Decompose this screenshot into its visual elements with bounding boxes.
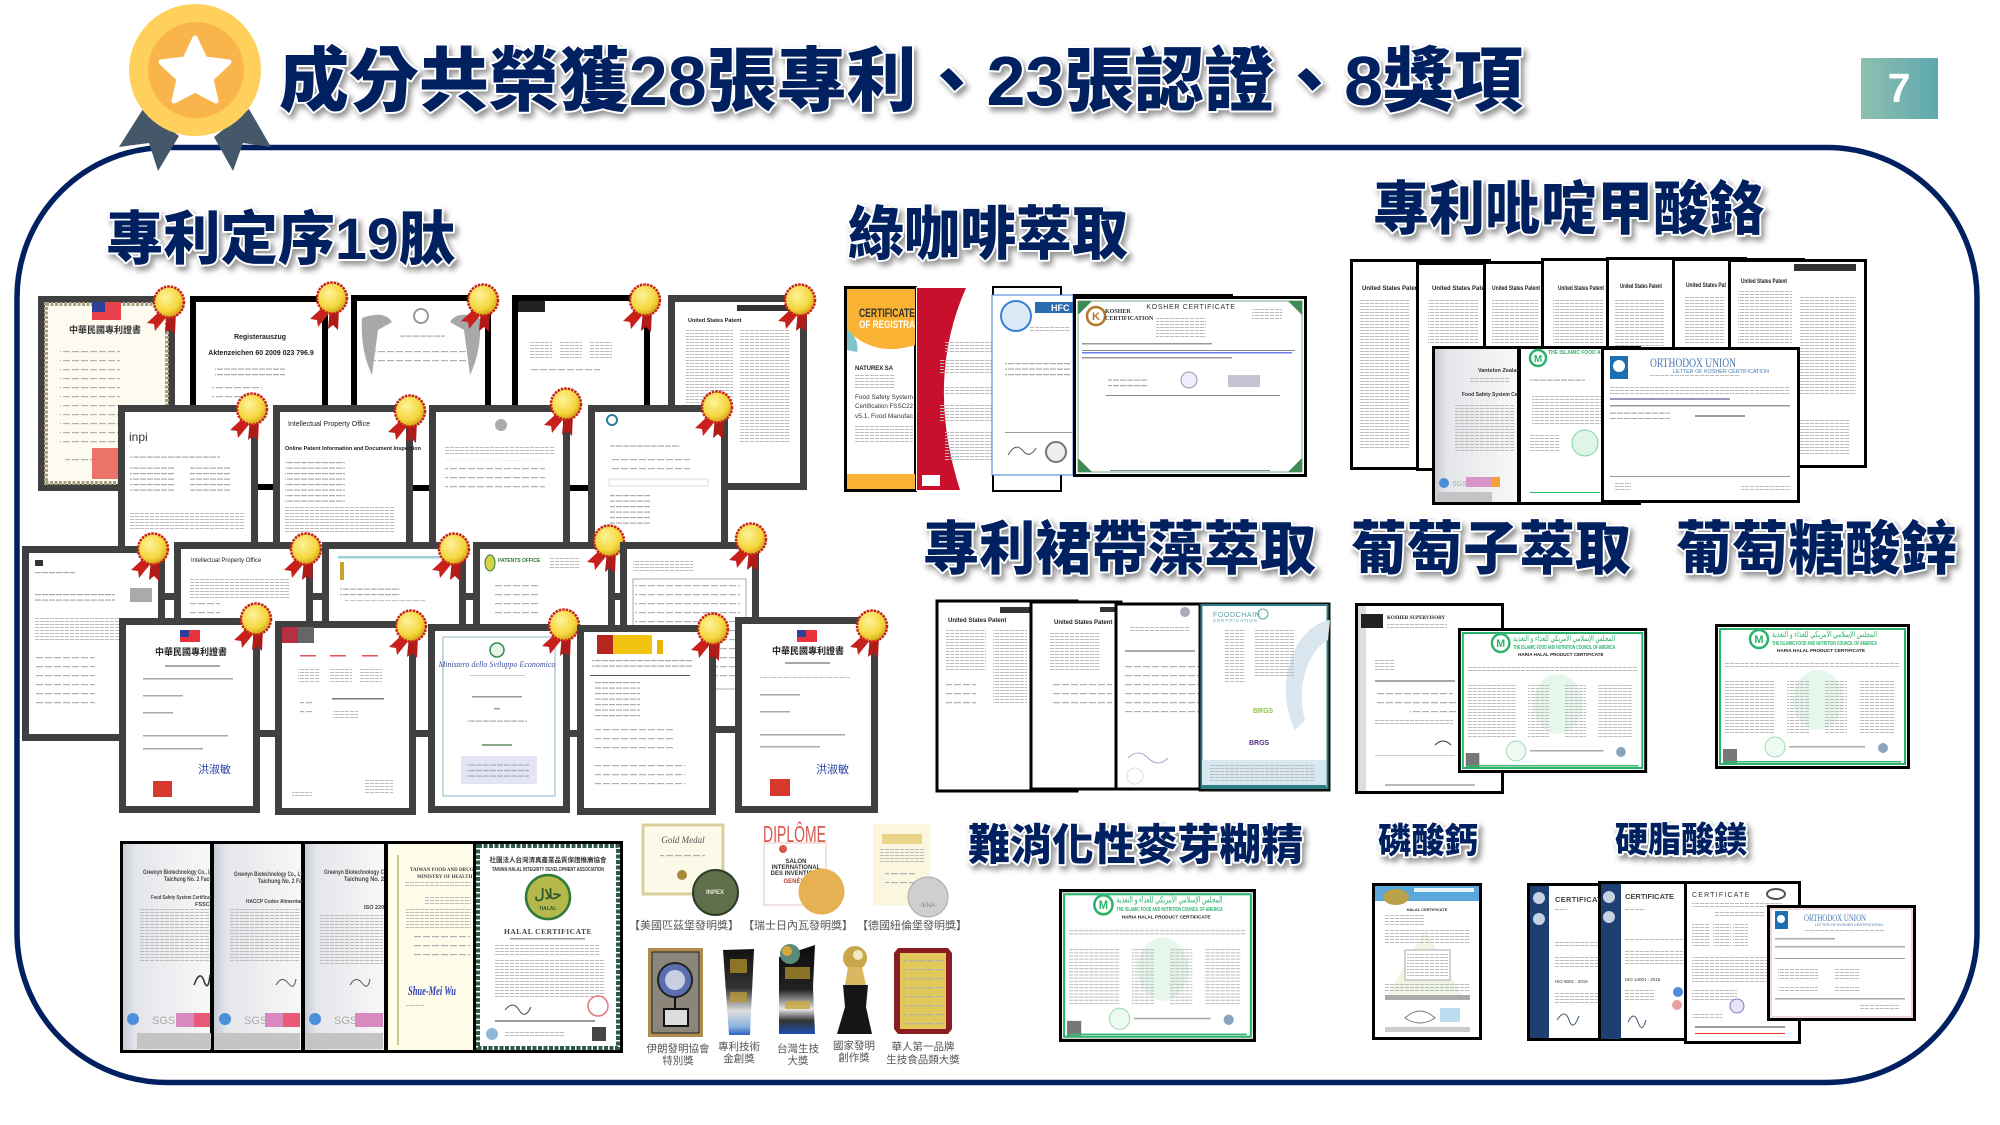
award: Pittsburgh invention medal: INPEX bbox=[706, 890, 724, 896]
certificate: German register: Aktenzeichen 60 2009 023 796.9 bbox=[208, 350, 314, 357]
panel: zinc gluconate bbox=[1676, 517, 1957, 768]
certificate: IFANCA dextrin: THE ISLAMIC FOOD AND NUTRITION COUNCIL OF AMERICA bbox=[1117, 907, 1223, 913]
certificate: Orthodox Union small bbox=[1768, 906, 1914, 1020]
certificate: Orthodox Union: ORTHODOX UNION bbox=[1650, 355, 1736, 370]
award: Nuremberg invention medal bbox=[857, 824, 967, 932]
award: patent technology gold trophy: 專利技術 bbox=[718, 1040, 760, 1053]
certificate: US patent stack 7: United States Patent bbox=[1741, 279, 1787, 285]
award: national invention trophy: 國家發明 bbox=[833, 1039, 875, 1052]
certificate: German register bbox=[193, 282, 347, 487]
award: top Chinese brand plaque bbox=[886, 948, 960, 1066]
certificate: Taiwan FDA: Shue-Mei Wu bbox=[408, 983, 456, 998]
certificate: US patent stack 3 bbox=[1484, 262, 1622, 462]
certificate: US patent bbox=[672, 284, 815, 486]
certificate: US patent A: United States Patent bbox=[948, 618, 1006, 624]
award: Geneva invention medal: DES INVENTIONS bbox=[771, 871, 821, 877]
award: Pittsburgh invention medal: Gold Medal bbox=[661, 835, 705, 845]
icon: gold medal with ribbons bbox=[119, 4, 271, 171]
certificate: IFANCA grape seed: M bbox=[1496, 638, 1505, 650]
certificate: IFANCA dextrin: HARIA HALAL PRODUCT CERTIFICATE bbox=[1122, 914, 1210, 920]
certificate: German register: Registerauszug bbox=[234, 334, 286, 341]
certificate: SGS FSSC: Food Safety System Certification bbox=[1462, 392, 1540, 398]
heading: magnesium stearate: 硬脂酸鎂 bbox=[1615, 821, 1747, 860]
certificate: FSSC Naturex: NATUREX SA bbox=[855, 366, 894, 372]
award: Taiwan biotech trophy: 大獎 bbox=[788, 1054, 809, 1067]
award: national invention trophy: 創作獎 bbox=[838, 1051, 870, 1064]
certificate: US patent stack 6 bbox=[1674, 260, 1804, 460]
heading: peptides: 專利定序19肽 bbox=[106, 207, 456, 272]
certificate: Intellectual Property Office bbox=[276, 396, 425, 596]
panel: facility certificates bbox=[122, 842, 622, 1052]
certificate: SGS FSSC 22000: FSSC 2 bbox=[195, 902, 214, 908]
certificate: Taiwan FDA: TAIWAN FOOD AND DRUG A bbox=[410, 868, 479, 873]
certificate: HFC halal bbox=[992, 287, 1073, 491]
heading: wakame: 專利裙帶藻萃取 bbox=[923, 517, 1316, 582]
certificate: SGS HACCP: HACCP Codex Alimentar bbox=[246, 899, 303, 905]
certificate: Taiwan halal: حلال bbox=[534, 886, 562, 902]
certificate: US patent stack 4: United States Patent bbox=[1558, 286, 1604, 292]
certificate: SGS FSSC: Vantelon Zealand LLC bbox=[1478, 368, 1535, 374]
award: Nuremberg invention medal: IENA bbox=[921, 903, 935, 909]
award: top Chinese brand plaque: 生技食品類大獎 bbox=[886, 1053, 960, 1066]
certificate: SGS FSSC 22000: Food Safety System Certificat bbox=[151, 895, 211, 901]
certificate: SGS ISO 22000 bbox=[304, 842, 386, 1052]
certificate: IFANCA grape seed: HARIA HALAL PRODUCT CERTIFICATE bbox=[1518, 652, 1604, 657]
certificate: New Jersey letter bbox=[1116, 604, 1204, 789]
certificate: Taiwan FDA: MINISTRY OF HEALTH A bbox=[417, 875, 477, 880]
certificate: Foodchain ID: FOODCHAIN bbox=[1213, 612, 1260, 619]
certificate: HFC halal: HFC bbox=[1051, 303, 1070, 313]
award: Taiwan biotech trophy: 台灣生技 bbox=[777, 1042, 819, 1055]
certificate: US patent stack 6: United States Pat bbox=[1686, 283, 1726, 289]
panel: calcium phosphate bbox=[1374, 822, 1480, 1038]
certificate: Foodchain ID: BRGS bbox=[1249, 740, 1270, 747]
certificate: SGS HACCP: Taichung No. 2 Fa bbox=[258, 878, 302, 885]
certificate: ISO 14001: ISO 14001 : 2015 bbox=[1625, 977, 1661, 982]
award: Geneva invention medal: GENÈVE bbox=[783, 877, 809, 885]
panel: grape seed extract bbox=[1351, 517, 1646, 792]
certificate: halal control bbox=[1686, 882, 1800, 1042]
certificate: table record bbox=[624, 524, 766, 730]
certificate: US patent stack 4 bbox=[1542, 260, 1680, 460]
certificate: FSSC Naturex: Certification FSSC22 bbox=[855, 404, 914, 410]
certificate: IFANCA dextrin bbox=[1061, 891, 1254, 1040]
certificate: Intellectual Property Office: Intellectual Property Office bbox=[288, 421, 370, 428]
page number badge: 7 bbox=[1888, 65, 1910, 111]
award: Geneva invention medal: 【瑞士日內瓦發明獎】 bbox=[743, 918, 853, 932]
certificate: Spanish patent bbox=[580, 614, 728, 812]
certificate: ISO 9001: CERTIFICATE bbox=[1555, 895, 1607, 904]
certificate: IFANCA zinc: المجلس الإسلامي الأمريكي للغذاء و التغذية bbox=[1772, 629, 1877, 639]
certificate: IFANCA zinc bbox=[1716, 626, 1908, 768]
certificate: kosher: CERTIFICATION bbox=[1105, 316, 1154, 322]
certificate: Taiwan FDA bbox=[386, 842, 479, 1052]
award: Nuremberg invention medal: 【德國紐倫堡發明獎】 bbox=[857, 918, 967, 932]
certificate: ROC patent one: 洪淑敏 bbox=[198, 762, 231, 776]
certificate: patent list bbox=[592, 392, 732, 596]
certificate: FSSC Naturex: CERTIFICATE bbox=[859, 306, 915, 320]
certificate: Taiwan halal: TAIWAN HALAL INTEGRITY DEVELOPMENT ASSOCIATION bbox=[492, 867, 604, 873]
certificate: FSSC Naturex: Food Safety System bbox=[855, 395, 913, 401]
award: Taiwan biotech trophy bbox=[777, 944, 819, 1067]
heading: green coffee: 綠咖啡萃取 bbox=[848, 202, 1128, 267]
award: Iran inventors association: 伊朗發明協會 bbox=[646, 1042, 710, 1055]
certificate: SGS FSSC bbox=[1434, 348, 1540, 504]
certificate: three column patent bbox=[515, 284, 660, 488]
certificate: US patent stack 2: United States Patent bbox=[1432, 286, 1490, 292]
page number badge bbox=[1861, 58, 1938, 119]
heading: grape seed: 葡萄子萃取 bbox=[1351, 517, 1631, 582]
award: Geneva invention medal: DIPLÔME bbox=[763, 820, 826, 847]
award: patent technology gold trophy bbox=[718, 949, 760, 1065]
certificate: patents office: PATENTS OFFICE bbox=[498, 558, 541, 564]
certificate: FSSC Naturex: v5.1, Food Manufac bbox=[855, 414, 913, 420]
certificate: Orthodox Union small: ORTHODOX UNION bbox=[1804, 914, 1866, 924]
certificate: halal letter: THE ISLAMIC FOOD AND NUTRITION bbox=[1548, 350, 1637, 356]
certificate: FSSC Naturex bbox=[846, 288, 916, 490]
certificate: SGS FSSC 22000: SGS bbox=[152, 1015, 175, 1027]
certificate: red ISO bbox=[916, 287, 1001, 491]
certificate: Taiwan patent bbox=[42, 286, 184, 488]
certificate: SGS ISO 22000: Taichung No. 2 bbox=[344, 876, 384, 883]
certificate: IFANCA grape seed: المجلس الإسلامي الأمريكي للغذاء و التغذية bbox=[1513, 633, 1615, 643]
certificate: SGS ISO 22000: SGS bbox=[334, 1015, 357, 1027]
panel: magnesium stearate bbox=[1528, 821, 1914, 1042]
certificate: IFANCA zinc: HARIA HALAL PRODUCT CERTIFICATE bbox=[1777, 648, 1865, 653]
award: Geneva invention medal bbox=[743, 820, 853, 932]
certificate: US patent stack 5 bbox=[1608, 258, 1746, 458]
certificate: halal letter: M bbox=[1534, 354, 1542, 365]
certificate: SGS FSSC 22000: Taichung No. 2 Fact bbox=[164, 876, 212, 883]
certificate: kosher supervisory: KOSHER SUPERVISORY bbox=[1387, 616, 1446, 621]
certificate: Foodchain ID: BRGS bbox=[1253, 708, 1274, 715]
certificate: calcium halal: HALAL CERTIFICATE bbox=[1407, 907, 1448, 912]
certificate: IFANCA zinc: M bbox=[1754, 634, 1764, 646]
certificate: US patent A bbox=[937, 601, 1077, 791]
panel: patented sequenced 19 peptides bbox=[26, 207, 887, 812]
certificate: US patent stack 7 bbox=[1730, 260, 1866, 466]
certificate: Italian patent bbox=[432, 388, 581, 596]
certificate: patents office bbox=[476, 526, 624, 734]
panel: green coffee extract bbox=[846, 202, 1306, 491]
certificate: SGS ISO 22000: ISO 220 bbox=[364, 905, 384, 911]
certificate: Italian ministry: Ministero dello Sviluppo Economico bbox=[438, 660, 555, 669]
certificate: kosher bbox=[1073, 294, 1306, 476]
certificate: US patent stack 1 bbox=[1352, 260, 1490, 468]
certificate: ROC patent one bbox=[122, 604, 271, 810]
certificate: Taiwan patent: 中華民國專利證書 bbox=[69, 324, 141, 335]
certificate: Taiwan halal bbox=[474, 842, 622, 1052]
award: Pittsburgh invention medal: 【美國匹茲堡發明獎】 bbox=[629, 918, 739, 932]
certificate: US patent stack 2 bbox=[1418, 264, 1556, 470]
heading: chromium picolinate: 專利吡啶甲酸鉻 bbox=[1373, 177, 1765, 242]
certificate: Taiwan halal: 社團法人台灣清真產業品質保證推廣協會 bbox=[490, 855, 607, 864]
certificate: Italian ministry bbox=[432, 610, 579, 810]
award: Pittsburgh invention medal bbox=[629, 825, 739, 932]
certificate: ISO 14001 bbox=[1600, 882, 1686, 1040]
certificate: dragon emblem bbox=[354, 284, 498, 488]
certificate: IFANCA grape seed bbox=[1459, 630, 1646, 772]
certificate: teal header record bbox=[326, 534, 469, 734]
heading: calcium phosphate: 磷酸鈣 bbox=[1378, 822, 1478, 861]
certificate: ROC patent two: 中華民國專利證書 bbox=[772, 645, 844, 656]
certificate: red logo patent bbox=[278, 610, 426, 812]
award: Iran inventors association bbox=[646, 948, 710, 1067]
title: 成分共榮獲28張專利、23張認證、8獎項 bbox=[279, 25, 1523, 126]
certificate: SGS FSSC 22000 bbox=[122, 842, 214, 1052]
certificate: SGS ISO 22000: Greenyn Biotechnology C bbox=[324, 869, 384, 876]
certificate: FSSC Naturex: OF REGISTRA bbox=[859, 319, 915, 331]
panel: patented wakame extract bbox=[923, 517, 1330, 791]
certificate: kosher: KOSHER bbox=[1105, 309, 1131, 315]
certificate: Orthodox Union small: LETTER OF KOSHER CERTIFICATION bbox=[1815, 922, 1883, 927]
certificate: INPI bbox=[122, 394, 267, 596]
certificate: SGS FSSC 22000: Greenyn Biotechnology Co., L bbox=[143, 869, 211, 876]
certificate: calcium halal bbox=[1374, 884, 1480, 1038]
certificate: US patent stack 3: United States Patent bbox=[1492, 286, 1540, 292]
award: patent technology gold trophy: 金創獎 bbox=[723, 1052, 755, 1065]
certificate: Orthodox Union bbox=[1602, 348, 1798, 502]
certificate: kosher: K bbox=[1092, 311, 1100, 323]
certificate: kosher: KOSHER CERTIFICATE bbox=[1146, 304, 1236, 311]
certificate: halal control: CERTIFICATE bbox=[1692, 892, 1750, 899]
certificate: Foodchain ID bbox=[1200, 604, 1330, 790]
certificate: ROC patent two: 洪淑敏 bbox=[816, 762, 849, 776]
certificate: Orthodox Union: LETTER OF KOSHER CERTIFICATION bbox=[1673, 369, 1769, 375]
panel: resistant dextrin bbox=[968, 822, 1303, 1040]
certificate: IFANCA dextrin: المجلس الإسلامي الأمريكي للغذاء و التغذية bbox=[1117, 895, 1223, 905]
certificate: halal letter bbox=[1520, 348, 1640, 504]
award: top Chinese brand plaque: 華人第一品牌 bbox=[892, 1040, 955, 1053]
heading: resistant dextrin: 難消化性麥芽糊精 bbox=[968, 822, 1303, 870]
certificate: SGS HACCP: Greenyn Biotechnology Co., Lt bbox=[234, 871, 303, 878]
certificate: SGS HACCP bbox=[212, 842, 303, 1052]
award: Geneva invention medal: SALON bbox=[786, 859, 806, 865]
certificate: US patent: United States Patent bbox=[688, 318, 742, 324]
certificate: ISO 9001 bbox=[1528, 884, 1607, 1040]
certificate: Foodchain ID: CERTIFICATION bbox=[1213, 618, 1257, 623]
award: national invention trophy bbox=[833, 946, 875, 1064]
certificate: IFANCA grape seed: THE ISLAMIC FOOD AND NUTRITION COUNCIL OF AMERICA bbox=[1513, 645, 1615, 651]
certificate: Intellectual Property Office: Online Patent Information and Document Inspection bbox=[285, 446, 422, 452]
heading: zinc gluconate: 葡萄糖酸鋅 bbox=[1676, 517, 1957, 582]
certificate: patent record one bbox=[26, 534, 168, 738]
panel: patented chromium picolinate bbox=[1352, 177, 1866, 504]
certificate: SGS HACCP: SGS bbox=[244, 1015, 267, 1027]
certificate: Taiwan halal: HALAL bbox=[540, 906, 556, 912]
certificate: IFANCA dextrin: M bbox=[1099, 900, 1108, 912]
certificate: IFANCA zinc: THE ISLAMIC FOOD AND NUTRITION COUNCIL OF AMERICA bbox=[1772, 641, 1877, 647]
certificate: ISO 14001: CERTIFICATE bbox=[1625, 892, 1674, 901]
panel: invention awards bbox=[629, 820, 967, 1067]
certificate: ROC patent one: 中華民國專利證書 bbox=[155, 646, 227, 657]
certificate: INPI: inpi bbox=[129, 430, 148, 444]
award: Geneva invention medal: INTERNATIONAL bbox=[772, 865, 821, 871]
certificate: US patent B: United States Patent bbox=[1054, 620, 1112, 626]
certificate: kosher supervisory bbox=[1356, 604, 1502, 792]
certificate: SGS FSSC: SGS bbox=[1452, 481, 1467, 488]
certificate: US patent stack 1: United States Patent bbox=[1362, 286, 1420, 292]
certificate: US patent stack 5: United States Patent bbox=[1620, 284, 1662, 290]
certificate: Taiwan halal: HALAL CERTIFICATE bbox=[504, 927, 592, 936]
certificate: US patent B bbox=[1031, 602, 1121, 789]
certificate: IPO record bbox=[178, 534, 321, 734]
certificate: ROC patent two bbox=[738, 610, 887, 810]
certificate: ISO 9001: ISO 9001 : 2015 bbox=[1555, 979, 1588, 984]
certificate: IPO record: Intellectual Property Office bbox=[191, 558, 262, 564]
award: Iran inventors association: 特別獎 bbox=[662, 1054, 694, 1067]
